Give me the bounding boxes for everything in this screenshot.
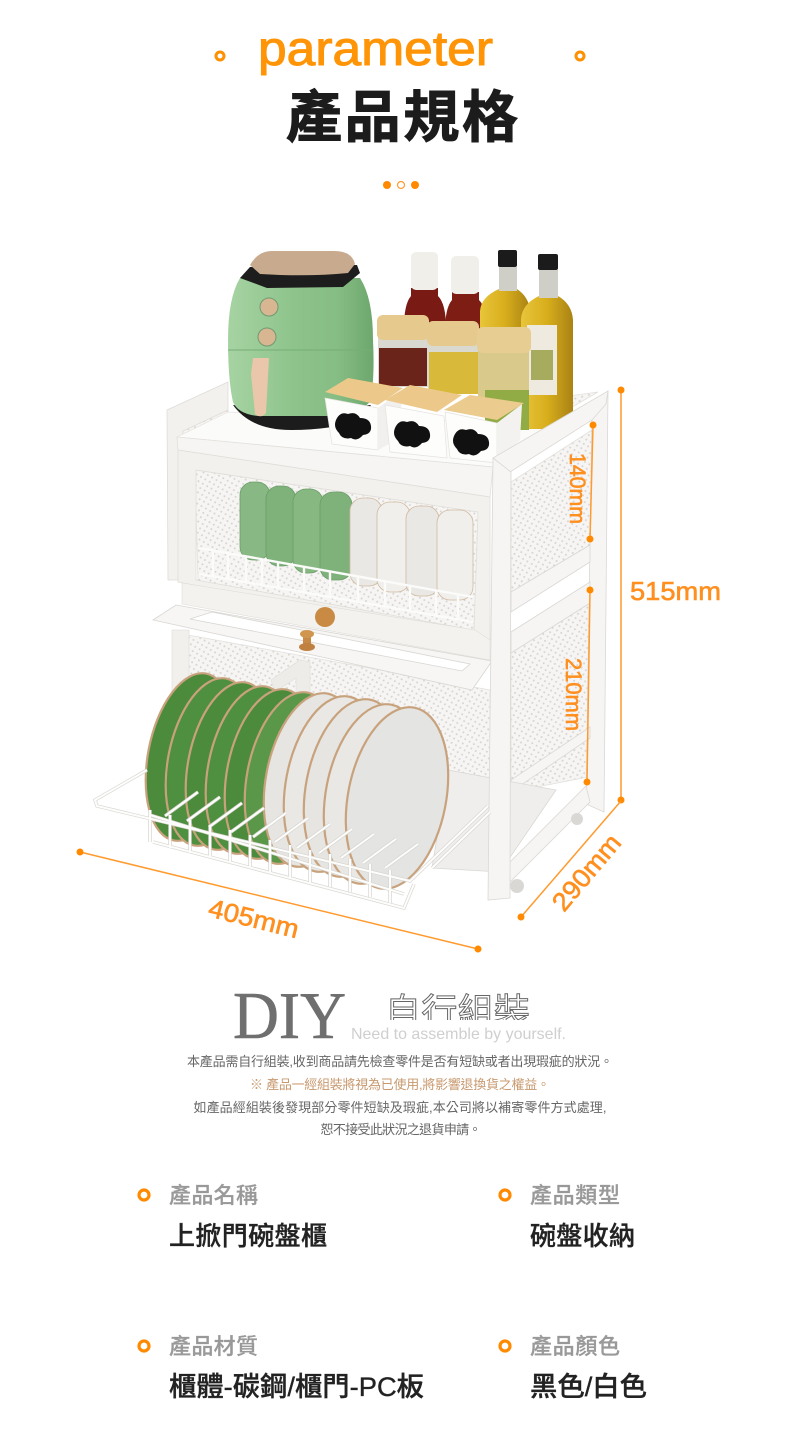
spec: material: [139, 1334, 424, 1402]
assembly notice text: [187, 1054, 613, 1137]
spec: material: 產品材質: [169, 1334, 258, 1359]
cabinet feet: [510, 813, 583, 893]
assembly notice text: 本產品需自行組裝,收到商品請先檢查零件是否有短缺或者出現瑕疵的狀況。: [187, 1054, 613, 1069]
english subtitle: Need to assemble by yourself.: [351, 1026, 566, 1043]
dimension: 210mm: [561, 586, 594, 786]
spec: colour: [500, 1334, 647, 1402]
spec: material: 櫃體-碳鋼/櫃門-PC板: [169, 1372, 424, 1402]
dimension: 515mm: 515mm: [630, 576, 721, 606]
product illustration: dish cabinet: [95, 250, 608, 908]
dimension: 290mm: [518, 801, 627, 920]
dimension: 405mm: 405mm: [206, 893, 302, 944]
bowls: white: [350, 498, 473, 600]
spec: colour: 黑色/白色: [530, 1372, 647, 1402]
left lower post and stay: [172, 630, 310, 780]
dimension: 515mm: [618, 386, 721, 804]
dimension: 140mm: 140mm: [565, 453, 590, 524]
cabinet: upper door frame: [178, 450, 490, 640]
top items: jars: [377, 315, 531, 430]
cabinet: shelf front face: [177, 437, 493, 497]
lower flip door: [153, 605, 492, 690]
wood knobs: [299, 607, 335, 651]
icon: right ring: [576, 52, 584, 60]
cabinet: left end rail: [167, 382, 228, 580]
english title: parameter: [258, 23, 493, 76]
pull-out wire basket: [95, 770, 490, 908]
top items: air fryer: [228, 251, 374, 430]
heading: parameter: [216, 23, 584, 76]
assembly notice text: 恕不接受此狀況之退貨申請。: [320, 1122, 482, 1137]
DIY word: DIY: [233, 979, 346, 1053]
heading: DIY: [234, 992, 564, 1042]
top items: spice boxes: [325, 378, 524, 463]
spec: product type: 碗盤收納: [530, 1221, 635, 1251]
bowls: green: [240, 482, 352, 580]
assembly notice text: 如產品經組裝後發現部分零件短缺及瑕疵,本公司將以補寄零件方式處理,: [194, 1100, 606, 1115]
dimension: 290mm: 290mm: [546, 828, 627, 917]
spec: product name: [139, 1183, 327, 1251]
title: 產品規格: [286, 86, 518, 149]
spec: colour: 產品顏色: [530, 1334, 620, 1359]
cabinet: upper door bottom rail: [182, 583, 490, 660]
upper dish rack: [199, 548, 473, 622]
spec: product type: 產品類型: [530, 1183, 620, 1208]
spec: product name: 產品名稱: [169, 1183, 258, 1208]
spec: product name: 上掀門碗盤櫃: [169, 1221, 327, 1251]
green and white plates: [133, 666, 463, 898]
assembly notice text: ※ 產品一經組裝將視為已使用,將影響退換貨之權益。: [250, 1077, 550, 1092]
icon: left ring: [216, 52, 224, 60]
dimension: 210mm: 210mm: [561, 658, 586, 731]
spec: product type: [500, 1183, 635, 1251]
cabinet: rear mesh panels: [183, 392, 598, 800]
dimension: 405mm: [76, 848, 482, 952]
title dots: [383, 181, 419, 189]
dimension: 140mm: [565, 422, 596, 542]
outlined chinese title: 自行組裝: [385, 991, 530, 1032]
cabinet: top shelf surface: [177, 402, 600, 467]
right side frame: [432, 391, 608, 900]
top items: bottles: [404, 250, 573, 429]
